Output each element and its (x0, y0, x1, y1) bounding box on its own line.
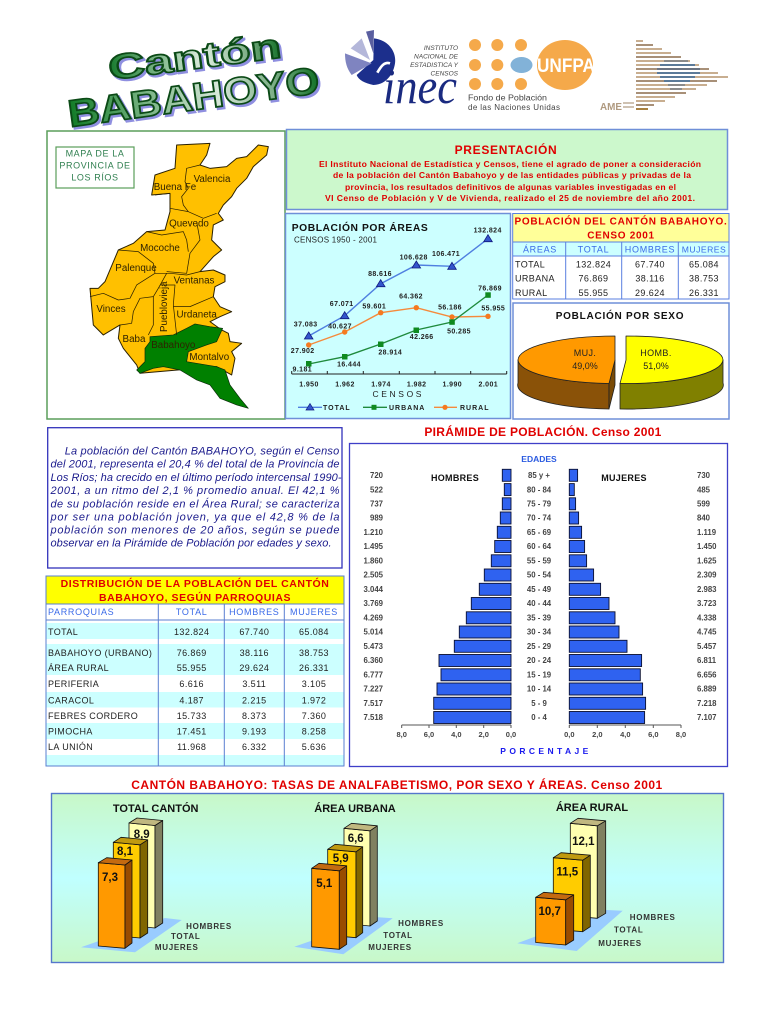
table: población del cantón censo 2001: RURAL (515, 288, 548, 298)
map shape: Los Ríos: Pueblovieja (159, 281, 170, 332)
chart: área urbana (294, 802, 444, 954)
table: distribución por parroquias: MUJERES (290, 607, 338, 617)
table: distribución por parroquias: 8.373 (242, 711, 267, 721)
table: distribución por parroquias: PIMOCHA (48, 727, 93, 737)
pie slice: mujeres: 49,0% (572, 361, 598, 371)
age labels: 85 y + (528, 471, 550, 480)
title: Cantón Babahoyo: Cantón (106, 27, 284, 88)
table: distribución por parroquias: 2.215 (242, 695, 267, 705)
table: población del cantón censo 2001: TOTAL (578, 244, 609, 254)
text block: descripción: observar en la Pirámide de Población por edades y sexo. (50, 538, 332, 550)
data labels: 76.869 (478, 286, 502, 292)
logo: UNFPA: UNFPA (537, 56, 595, 77)
chart: área urbana: 5,9 (333, 853, 349, 865)
panel: población por áreas line chart (286, 214, 510, 418)
values: mujeres: 4.338 (697, 614, 717, 622)
values: hombres: 5.014 (363, 628, 384, 637)
table: distribución por parroquias: 38.116 (240, 648, 269, 658)
age labels: 40 - 44 (527, 599, 552, 608)
percentage axes: 6,0 (648, 730, 659, 739)
percentage axes: 6,0 (424, 730, 434, 739)
table: población del cantón censo 2001: 38.116 (635, 274, 665, 284)
x axis labels: 2.001 (479, 382, 498, 388)
chart: área urbana: HOMBRES (398, 919, 444, 928)
table: distribución por parroquias: 8.258 (302, 727, 326, 737)
data labels: 9.181 (293, 366, 312, 374)
table: distribución por parroquias: 55.955 (177, 663, 207, 673)
chart: total cantón: TOTAL CANTÓN (113, 802, 199, 815)
panel: pirámide de población: MUJERES (601, 473, 647, 483)
table: distribución por parroquias: PARROQUIAS (48, 607, 114, 617)
percentage axes (396, 725, 686, 756)
values: hombres: 5.473 (363, 642, 384, 651)
map label: PROVINCIA DE (59, 160, 131, 170)
table: distribución por parroquias: ÁREA RURAL (48, 663, 109, 673)
chart: área rural: 10,7 (539, 906, 561, 918)
age labels: 65 - 69 (527, 528, 552, 537)
values: mujeres: 5.457 (697, 642, 717, 651)
values: hombres: 989 (370, 514, 384, 523)
panel: presentación: PRESENTACIÓN (455, 142, 557, 157)
percentage axes: 8,0 (676, 730, 686, 739)
values: mujeres: 7.107 (697, 713, 717, 722)
panel: presentación: VI Censo de Población y V de Vivienda, realizado el 25 de noviembre del año 2001. (325, 193, 695, 203)
chart: área urbana: TOTAL (383, 931, 413, 940)
table: población del cantón censo 2001: 29.624 (635, 288, 665, 298)
x axis labels: 1.990 (443, 382, 462, 388)
title: Cantón Babahoyo (66, 27, 324, 138)
table: distribución por parroquias: PERIFERIA (48, 679, 99, 689)
table: población del cantón censo 2001: 38.753 (689, 274, 719, 284)
values: hombres: 3.769 (363, 599, 384, 608)
panel: presentación (286, 130, 728, 210)
legend (298, 404, 490, 412)
legend: RURAL (460, 405, 490, 412)
data labels: 28.914 (378, 350, 402, 356)
table: distribución por parroquias: 6.332 (242, 742, 267, 752)
age labels (527, 471, 552, 722)
table: distribución por parroquias: TOTAL (176, 607, 208, 617)
table: distribución por parroquias: 4.187 (179, 695, 204, 705)
heading: tasas de analfabetismo: CANTÓN BABAHOYO: TASAS DE ANALFABETISMO, POR SEXO Y ÁREAS. Censo 2001 (131, 777, 663, 792)
table: distribución por parroquias: 76.869 (177, 648, 207, 658)
data labels: 132.824 (474, 228, 502, 234)
table: población del cantón censo 2001: HOMBRES (625, 244, 675, 254)
table: población del cantón censo 2001: 76.869 (579, 274, 608, 284)
map shape: Los Ríos: Baba (123, 334, 146, 345)
chart: área rural (517, 801, 676, 951)
map shape: Los Ríos: Quevedo (169, 218, 209, 230)
table: distribución por parroquias: 3.511 (242, 679, 266, 689)
pie slice: hombres: 51,0% (643, 361, 669, 371)
age labels: 35 - 39 (527, 614, 552, 622)
values: mujeres: 6.656 (697, 670, 717, 680)
values: hombres (363, 471, 384, 722)
table: distribución por parroquias: 5.636 (302, 742, 326, 752)
logo: AME (600, 40, 728, 113)
chart: área urbana: MUJERES (368, 943, 412, 952)
age labels: 25 - 29 (527, 642, 552, 651)
values: hombres: 7.518 (363, 713, 384, 722)
data labels: 106.628 (400, 254, 428, 262)
data labels: 55.955 (481, 306, 505, 312)
percentage axes: 4,0 (620, 730, 631, 739)
values: hombres: 6.777 (363, 670, 383, 680)
table: población del cantón censo 2001: CENSO 2001 (587, 230, 655, 242)
percentage axes: 0,0 (564, 730, 575, 739)
table: distribución por parroquias: 11.968 (177, 742, 206, 752)
percentage axes: 0,0 (506, 730, 516, 739)
data labels: 88.616 (368, 271, 392, 278)
values: hombres: 1.860 (363, 556, 384, 566)
age labels: 20 - 24 (527, 656, 552, 665)
logo: AME: AME (600, 102, 622, 113)
x axis labels: 1.974 (371, 382, 391, 388)
values: mujeres: 730 (697, 471, 711, 480)
values: hombres: 4.269 (363, 614, 384, 622)
title: Cantón Babahoyo: BABAHOYO (68, 62, 324, 138)
chart: área rural: TOTAL (614, 926, 643, 934)
table: población del cantón censo 2001: TOTAL (515, 260, 545, 270)
text block: descripción: del 2001, representa el 20,4 % del total de la Provincia de (50, 458, 340, 470)
chart: total cantón: 8,1 (117, 846, 134, 858)
logo: INEC: CENSOS (431, 70, 459, 78)
chart: área urbana: 6,6 (348, 833, 364, 845)
values: hombres: 6.360 (363, 656, 384, 665)
map shape: Los Ríos: Babahoyo (151, 340, 196, 351)
table: distribución por parroquias: 3.105 (302, 679, 326, 689)
pie slice: mujeres (518, 336, 615, 409)
data labels: 42.266 (410, 334, 434, 341)
values: mujeres: 2.983 (697, 585, 717, 594)
chart: área urbana: 5,1 (316, 878, 333, 890)
map shape: Los Ríos: Buena Fe (154, 182, 197, 193)
values: hombres: 1.210 (363, 528, 384, 537)
percentage axes: 4,0 (451, 730, 462, 739)
percentage axes: 2,0 (478, 730, 489, 739)
table: población del cantón censo 2001: 65.084 (689, 260, 719, 270)
table: distribución por parroquias: 7.360 (302, 711, 326, 721)
data labels: 40.627 (328, 324, 352, 330)
values: hombres: 7.517 (363, 699, 383, 708)
table: distribución por parroquias: FEBRES CORDERO (48, 711, 138, 721)
logo: INEC: INSTITUTO (424, 45, 458, 52)
panel: pirámide de población: EDADES (521, 454, 557, 464)
age labels: 5 - 9 (531, 699, 547, 708)
logo: UNFPA (468, 39, 595, 112)
table: población del cantón censo 2001: 132.824 (576, 260, 611, 270)
table: población del cantón censo 2001: 55.955 (579, 288, 608, 298)
map shape: Los Ríos: Valencia (194, 174, 231, 185)
text block: descripción: 2001, a un ritmo del 2,1 % promedio anual. El 42,1 % (50, 485, 340, 497)
values: mujeres: 7.218 (697, 699, 717, 708)
panel: pirámide de población: HOMBRES (431, 473, 479, 483)
text block: descripción: Los Ríos; ha crecido en el último período intercensal 1990- (50, 472, 342, 484)
age labels: 45 - 49 (527, 585, 552, 594)
data labels (291, 228, 505, 374)
chart: área rural: 11,5 (556, 866, 579, 878)
values: mujeres: 3.723 (697, 599, 717, 608)
age labels: 30 - 34 (527, 628, 552, 637)
table: distribución por parroquias: TOTAL (48, 627, 78, 637)
text block: descripción: población son menores de 20 años, según se puede (50, 524, 340, 536)
values: mujeres: 599 (697, 500, 711, 508)
table: distribución por parroquias: BABAHOYO, SEGÚN PARROQUIAS (99, 591, 291, 604)
age labels: 15 - 19 (527, 670, 552, 680)
series: total (304, 235, 492, 339)
logo: INEC: inec (383, 58, 457, 114)
chart: total cantón (81, 802, 232, 952)
map shape: Los Ríos: Vinces (96, 304, 126, 315)
table: población del cantón censo 2001: MUJERES (682, 244, 726, 254)
data labels: 16.444 (337, 362, 361, 368)
panel: analfabetismo (52, 794, 724, 962)
table: distribución por parroquias: 26.331 (299, 663, 329, 673)
values: mujeres: 6.811 (697, 656, 717, 665)
text block: descripción (48, 428, 342, 568)
values: hombres: 7.227 (363, 685, 383, 694)
x axis labels: 1.950 (299, 382, 319, 388)
series: urbana (306, 292, 491, 366)
panel: población por sexo pie chart: POBLACIÓN POR SEXO (556, 309, 684, 322)
map shape: Los Ríos: Ventanas (174, 276, 215, 286)
chart: total cantón: TOTAL (171, 932, 200, 941)
x axis labels: CENSOS (373, 389, 424, 399)
values: hombres: 1.495 (363, 542, 384, 551)
panel: presentación: El Instituto Nacional de Estadística y Censos, tiene el agrado de poner a consideración (319, 159, 701, 169)
data labels: 67.071 (330, 301, 354, 308)
chart: área rural: MUJERES (598, 939, 642, 948)
age labels: 75 - 79 (527, 500, 552, 508)
bars: mujeres (569, 469, 646, 724)
table: distribución por parroquias: 65.084 (299, 627, 329, 637)
logo: INEC: NACIONAL DE (414, 54, 459, 60)
table: población del cantón censo 2001: 67.740 (635, 260, 665, 270)
map shape: Los Ríos: Palenque (115, 263, 157, 274)
text block: descripción: por ser una población joven, ya que el 42,8 % de la (50, 511, 340, 523)
x axis labels (299, 382, 498, 399)
table: distribución por parroquias: 9.193 (242, 727, 267, 737)
data labels: 64.362 (399, 294, 423, 300)
map shape: Los Ríos: Urdaneta (177, 310, 217, 320)
map shape: Los Ríos (90, 143, 268, 408)
bars: hombres (434, 469, 511, 724)
percentage axes: 2,0 (592, 730, 603, 739)
age labels: 0 - 4 (531, 713, 547, 722)
values: mujeres: 6.889 (697, 685, 717, 694)
values: mujeres (697, 471, 717, 722)
chart: área rural: 12,1 (572, 836, 595, 848)
x axis labels: 1.962 (335, 382, 355, 388)
title: Cantón Babahoyo: Cantón (108, 29, 286, 90)
values: hombres: 2.505 (363, 571, 384, 580)
age labels: 60 - 64 (527, 542, 552, 551)
age labels: 10 - 14 (527, 685, 552, 694)
values: mujeres: 4.745 (697, 628, 717, 637)
table: distribución por parroquias: DISTRIBUCIÓN DE LA POBLACIÓN DEL CANTÓN (61, 577, 329, 590)
table: distribución por parroquias: 29.624 (239, 663, 269, 673)
text block: descripción: La población del Cantón BABAHOYO, según el Censo (65, 445, 339, 457)
table: distribución por parroquias: 132.824 (174, 627, 209, 637)
table: distribución por parroquias: 38.753 (299, 648, 329, 658)
table: población del cantón censo 2001: 26.331 (689, 288, 719, 298)
values: mujeres: 2.309 (697, 571, 717, 580)
logo: UNFPA: Fondo de Población (468, 94, 547, 103)
table: distribución por parroquias: 15.733 (177, 711, 207, 721)
data labels: 59.601 (362, 304, 386, 310)
chart: área rural: ÁREA RURAL (556, 801, 628, 814)
table: distribución por parroquias (46, 576, 344, 766)
chart: área rural: HOMBRES (630, 913, 676, 922)
data labels: 106.471 (432, 251, 460, 258)
pie slice: hombres: HOMB. (640, 348, 672, 358)
table: distribución por parroquias: 67.740 (239, 627, 269, 637)
pie slice: hombres (620, 336, 723, 409)
logo: UNFPA: de las Naciones Unidas (468, 103, 560, 112)
legend: TOTAL (323, 405, 351, 412)
values: hombres: 522 (370, 485, 384, 494)
text block: descripción: de su población reside en el Área Rural; se caracteriza (50, 497, 340, 510)
values: mujeres: 1.450 (697, 542, 717, 551)
table: población del cantón censo 2001: URBANA (515, 274, 555, 284)
panel: pirámide de población (350, 444, 728, 766)
table: distribución por parroquias: LA UNIÓN (48, 742, 93, 752)
chart: área urbana: ÁREA URBANA (314, 802, 396, 815)
data labels: 50.285 (447, 328, 471, 336)
pie slice: mujeres: MUJ. (574, 348, 596, 358)
panel: map (47, 131, 285, 419)
age labels: 80 - 84 (527, 485, 552, 494)
chart: total cantón: 8,9 (134, 829, 150, 841)
age labels: 70 - 74 (527, 514, 552, 523)
panel: población por sexo pie chart (513, 303, 729, 419)
heading: pirámide: PIRÁMIDE DE POBLACIÓN. Censo 2001 (424, 424, 662, 439)
map label: MAPA DE LA (66, 148, 124, 158)
panel: presentación: provincia, los resultados definitivos de algunas variables investigadas en el (345, 182, 676, 192)
panel: población por áreas line chart: POBLACIÓN POR ÁREAS (292, 221, 428, 234)
data labels: 37.083 (294, 322, 318, 328)
axis (292, 371, 507, 374)
map shape: Los Ríos: Mocoche (140, 243, 180, 254)
data labels: 56.186 (438, 304, 462, 312)
series: rural (306, 305, 491, 348)
panel: presentación: de la población del Cantón Babahoyo y de las entidades públicas y privadas de la (333, 170, 691, 180)
table: población del cantón censo 2001: ÁREAS (523, 244, 557, 254)
table: población del cantón censo 2001: POBLACIÓN DEL CANTÓN BABAHOYO. (514, 214, 728, 228)
percentage axes: PORCENTAJE (500, 746, 592, 756)
age labels: 55 - 59 (527, 556, 552, 566)
values: hombres: 737 (370, 500, 383, 508)
values: hombres: 720 (370, 471, 384, 480)
table: distribución por parroquias: 6.616 (179, 679, 204, 689)
values: mujeres: 1.119 (697, 528, 717, 537)
table: población del cantón censo 2001 (513, 214, 729, 299)
data labels: 27.902 (291, 348, 315, 355)
logo: INEC (345, 30, 459, 114)
values: mujeres: 1.625 (697, 556, 717, 566)
legend: URBANA (389, 405, 425, 412)
table: distribución por parroquias: CARACOL (48, 695, 94, 705)
values: mujeres: 485 (697, 485, 711, 494)
values: hombres: 3.044 (363, 585, 384, 594)
map shape: Los Ríos: Montalvo (189, 352, 230, 363)
x axis labels: 1.982 (407, 382, 426, 388)
values: mujeres: 840 (697, 514, 711, 523)
percentage axes: 8,0 (396, 730, 407, 739)
map label (56, 147, 134, 188)
title: Cantón Babahoyo: BABAHOYO (66, 60, 322, 136)
panel: población por áreas line chart: CENSOS 1950 - 2001 (294, 236, 378, 244)
table: distribución por parroquias: BABAHOYO (URBANO) (48, 648, 152, 658)
table: distribución por parroquias: 17.451 (177, 727, 207, 737)
map label: LOS RÍOS (71, 172, 119, 182)
chart: total cantón: MUJERES (155, 943, 198, 952)
chart: total cantón: HOMBRES (186, 922, 232, 931)
age labels: 50 - 54 (527, 571, 552, 580)
table: distribución por parroquias: 1.972 (302, 695, 326, 705)
logo: INEC: ESTADISTICA Y (410, 62, 459, 69)
chart: total cantón: 7,3 (102, 872, 118, 884)
table: distribución por parroquias: HOMBRES (229, 607, 280, 617)
